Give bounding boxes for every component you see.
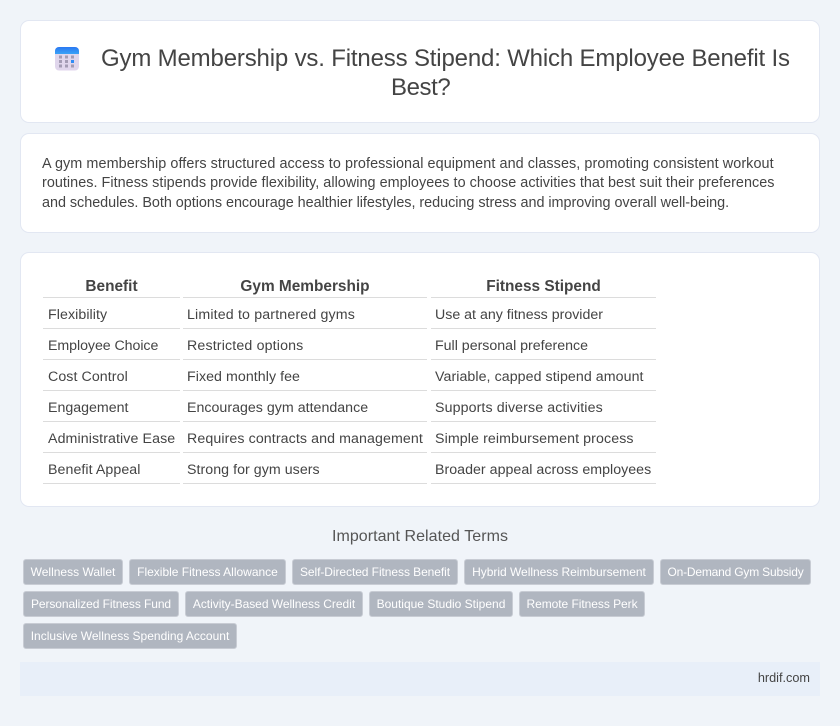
title: Best?	[391, 74, 450, 101]
comparison table: Fitness Stipend	[486, 278, 601, 295]
comparison table: Limited to partnered gyms	[187, 307, 355, 323]
footer	[20, 662, 820, 696]
related terms tags	[23, 559, 811, 649]
comparison table: Benefit	[85, 278, 138, 295]
comparison table: Requires contracts and management	[187, 431, 423, 447]
intro text: A gym membership offers structured access to professional equipment and classes, promoting consistent workout	[42, 156, 774, 172]
comparison table: Broader appeal across employees	[435, 462, 651, 478]
related terms tags: Activity-Based Wellness Credit	[193, 597, 355, 611]
comparison table: Engagement	[48, 400, 128, 416]
comparison table: Benefit Appeal	[48, 462, 140, 478]
footer source text: hrdif.com	[758, 671, 810, 685]
related terms tags: Hybrid Wellness Reimbursement	[472, 565, 646, 579]
comparison table: Gym Membership	[240, 278, 370, 295]
related terms tags: Wellness Wallet	[31, 565, 115, 579]
comparison table: Employee Choice	[48, 338, 158, 354]
comparison table: Restricted options	[187, 338, 303, 354]
panel: intro paragraph	[20, 133, 820, 233]
comparison table: Strong for gym users	[187, 462, 320, 478]
comparison table	[43, 278, 656, 484]
related terms tags: Boutique Studio Stipend	[377, 597, 505, 611]
comparison table: Full personal preference	[435, 338, 588, 354]
intro text	[42, 156, 774, 211]
comparison table: Cost Control	[48, 369, 128, 385]
related terms tags: Self-Directed Fitness Benefit	[300, 565, 450, 579]
comparison table: Supports diverse activities	[435, 400, 603, 416]
related terms tags: Remote Fitness Perk	[526, 597, 638, 611]
related terms tags: Inclusive Wellness Spending Account	[31, 629, 229, 643]
panel: comparison table	[20, 252, 820, 507]
comparison table: Use at any fitness provider	[435, 307, 603, 323]
panel: title header	[20, 20, 820, 123]
related terms tags: On-Demand Gym Subsidy	[667, 565, 804, 579]
title	[101, 45, 790, 101]
comparison table: Simple reimbursement process	[435, 431, 634, 447]
related terms tags: Personalized Fitness Fund	[31, 597, 171, 611]
comparison table: Fixed monthly fee	[187, 369, 300, 385]
comparison table: Variable, capped stipend amount	[435, 369, 644, 385]
title: Gym Membership vs. Fitness Stipend: Which Employee Benefit Is	[101, 45, 790, 72]
comparison table: Encourages gym attendance	[187, 400, 368, 416]
comparison table: Flexibility	[48, 307, 107, 323]
heading: related terms: Important Related Terms	[332, 528, 508, 545]
icon: calendar	[55, 47, 79, 70]
related terms tags: Flexible Fitness Allowance	[137, 565, 278, 579]
intro text: and schedules. Both options encourage healthier lifestyles, reducing stress and improving overall well-being.	[42, 195, 729, 211]
intro text: routines. Fitness stipends provide flexibility, allowing employees to choose activities that best suit their preferences	[42, 175, 774, 191]
comparison table: Administrative Ease	[48, 431, 175, 447]
